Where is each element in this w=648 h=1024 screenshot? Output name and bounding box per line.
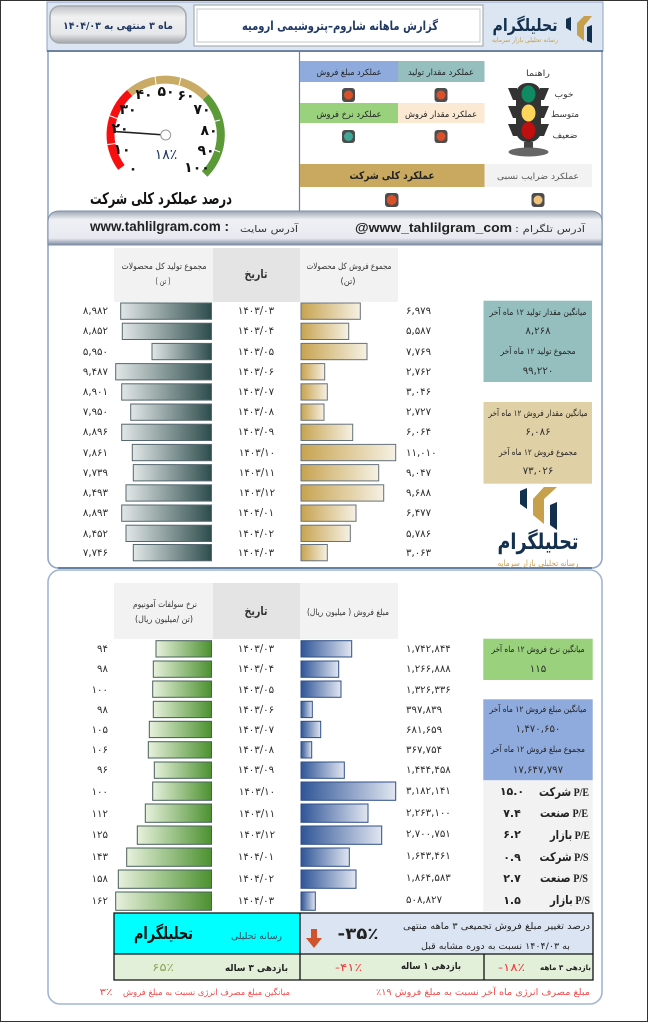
column header: date: تاریخ bbox=[244, 267, 268, 281]
values: sales rate: ۱۱۲ bbox=[92, 809, 109, 820]
values: sales amount: ۱,۶۴۳,۴۶۱ bbox=[406, 851, 451, 862]
light: sales quantity bbox=[434, 130, 448, 143]
return cell: 3 year: ۶۵٪ bbox=[152, 961, 174, 974]
values: sales rate: ۹۸ bbox=[97, 664, 109, 675]
stat box: sales amount averages: مجموع مبلغ فروش ۱۲ ماه آخر bbox=[490, 743, 585, 755]
bars: sales amount bbox=[301, 641, 396, 910]
values: sales rate: ۹۶ bbox=[97, 765, 108, 776]
legend title: راهنما bbox=[526, 69, 550, 79]
values: sales amount: ۱,۴۴۴,۴۵۸ bbox=[406, 765, 451, 776]
header logo: تحلیلگرام bbox=[492, 15, 558, 36]
values: production: ۸,۸۵۲ bbox=[83, 326, 109, 337]
dates: production table: ۱۴۰۳/۱۰ bbox=[239, 448, 275, 459]
dates: production table: ۱۴۰۳/۰۷ bbox=[238, 387, 275, 398]
cell: ratio performance: عملکرد ضرایب نسبی bbox=[497, 172, 579, 182]
values: sales rate: ۱۶۲ bbox=[92, 896, 109, 907]
panel: lower report frame bbox=[48, 570, 602, 1004]
values: sales rate: ۹۸ bbox=[97, 705, 109, 716]
values: production: ۷,۹۵۰ bbox=[83, 407, 108, 418]
stat box: sales averages: ۶,۰۸۶ bbox=[525, 427, 551, 438]
column header: total sales bbox=[300, 248, 398, 302]
stat box: sales averages: ۷۳,۰۲۶ bbox=[523, 466, 553, 477]
telegram address bbox=[355, 220, 585, 235]
values: sales amount: ۲,۲۶۳,۱۰۰ bbox=[406, 808, 451, 819]
values: sales: ۲,۷۲۷ bbox=[406, 407, 432, 418]
dates: production table: ۱۴۰۳/۰۶ bbox=[238, 367, 274, 378]
column header: ammonium sulfate rate: (تن /میلیون ریال) bbox=[135, 615, 193, 625]
divider between gauge and performance panel bbox=[298, 51, 300, 212]
dates: sales table: ۱۴۰۳/۱۰ bbox=[239, 787, 275, 798]
panel: valuation ratios bbox=[483, 780, 593, 911]
values: sales amount: ۳,۱۸۲,۱۴۱ bbox=[406, 786, 451, 797]
stat box: production averages: میانگین مقدار تولید ۱۲ ماه آخر bbox=[489, 306, 586, 318]
values: sales rate: ۱۰۰ bbox=[92, 685, 108, 696]
values: sales: ۶,۹۷۹ bbox=[406, 306, 432, 317]
report title: گزارش ماهانه شاروم–پتروشیمی ارومیه bbox=[242, 18, 439, 34]
values: production: ۵,۹۵۰ bbox=[83, 347, 108, 358]
gauge scale numbers: ۵۰ bbox=[157, 84, 175, 100]
values: sales: ۹,۰۴۷ bbox=[406, 468, 432, 479]
dates: sales table: ۱۴۰۴/۰۲ bbox=[238, 874, 275, 885]
values: production: ۹,۴۸۷ bbox=[83, 367, 109, 378]
values: sales rate bbox=[92, 644, 109, 907]
ratio: company P/S: P/S شرکت bbox=[540, 850, 589, 864]
dates: production table: ۱۴۰۳/۱۱ bbox=[239, 468, 275, 479]
column header: date: تاریخ bbox=[244, 604, 268, 618]
gauge tan arc bbox=[130, 80, 206, 97]
stat box: sales amount averages: ۱,۴۷۰,۶۵۰ bbox=[516, 724, 560, 735]
website address: www.tahlilgram.com : bbox=[89, 218, 229, 234]
values: sales: ۹,۶۸۸ bbox=[406, 488, 432, 499]
values: production: ۸,۹۸۲ bbox=[83, 306, 109, 317]
values: sales: ۶,۰۶۴ bbox=[406, 427, 431, 438]
return cell: 1 year: -۴۱٪ bbox=[335, 961, 362, 974]
values: sales amount: ۱,۷۴۲,۸۴۴ bbox=[406, 644, 451, 655]
column header: ammonium sulfate rate bbox=[114, 583, 213, 639]
gauge needle bbox=[115, 128, 171, 140]
ratio: company P/E bbox=[500, 785, 589, 799]
cell: sales amount performance bbox=[300, 61, 398, 82]
energy value: average: ۳٪ bbox=[100, 987, 112, 998]
values: production: ۸,۴۹۳ bbox=[83, 488, 109, 499]
values: sales: ۵,۵۸۷ bbox=[406, 326, 432, 337]
cell: overall performance: عملکرد کلی شرکت bbox=[350, 170, 434, 182]
values: sales amount: ۲,۷۰۰,۷۵۱ bbox=[406, 829, 451, 840]
dates: production table: ۱۴۰۴/۰۳ bbox=[238, 548, 275, 559]
values: sales rate: ۹۴ bbox=[97, 644, 108, 655]
dates: sales table: ۱۴۰۳/۱۲ bbox=[239, 830, 276, 841]
ratio: market P/S: ۱.۵ bbox=[503, 894, 521, 907]
bars: sales rate bbox=[116, 641, 212, 910]
stat box: sales averages: مجموع فروش ۱۲ ماه آخر bbox=[498, 446, 577, 458]
stat box: production averages: ۹۹,۲۲۰ bbox=[523, 366, 553, 377]
dates: production table: ۱۴۰۳/۰۸ bbox=[238, 407, 275, 418]
values: sales rate: ۱۵۸ bbox=[92, 874, 109, 885]
values: production: ۷,۸۶۱ bbox=[83, 448, 108, 459]
dates: sales table: ۱۴۰۳/۰۴ bbox=[238, 664, 274, 675]
cell: overall performance bbox=[300, 164, 484, 187]
change cell: به ۱۴۰۴/۰۳ نسبت به دوره مشابه قبل bbox=[421, 942, 570, 952]
cell: sales quantity performance bbox=[398, 103, 484, 123]
gauge green arc bbox=[205, 97, 221, 174]
light: production bbox=[434, 88, 448, 102]
values: sales rate: ۱۰۵ bbox=[92, 725, 108, 736]
bars: production bbox=[116, 303, 212, 561]
column header: date bbox=[213, 583, 300, 639]
panel: production and sales table bbox=[83, 248, 437, 561]
dates: sales table: ۱۴۰۳/۱۱ bbox=[239, 809, 275, 820]
ratio: market P/E bbox=[503, 828, 590, 842]
values: production: ۸,۹۰۱ bbox=[83, 387, 108, 398]
logo: Tahlilgram: تحلیلگرام bbox=[498, 528, 578, 555]
stat box: average sales rate bbox=[483, 639, 593, 680]
values: sales amount: ۱,۸۶۴,۵۸۳ bbox=[406, 873, 451, 884]
values: sales amount: ۶۸۱,۶۵۹ bbox=[406, 725, 443, 736]
column header: total production bbox=[114, 248, 213, 302]
values: sales amount bbox=[406, 644, 451, 906]
values: production: ۸,۸۹۳ bbox=[83, 508, 109, 519]
panel: upper report frame bbox=[48, 51, 602, 568]
dates: production table: ۱۴۰۳/۰۵ bbox=[238, 347, 274, 358]
legend label: weak: ضعیف bbox=[552, 131, 578, 141]
values: sales: ۳,۰۶۳ bbox=[406, 548, 432, 559]
column header: sales amount bbox=[300, 583, 398, 639]
values: sales rate: ۱۴۳ bbox=[92, 852, 109, 863]
values: sales rate: ۱۰۶ bbox=[92, 745, 108, 756]
return cell: 3 year bbox=[114, 954, 300, 980]
energy note: last month: مبلغ مصرف انرژی ماه آخر نسبت به مبلغ فروش ۱۹٪ bbox=[376, 986, 590, 998]
dates: sales table: ۱۴۰۳/۰۵ bbox=[238, 685, 274, 696]
return cell: 1 year: بازدهی ۱ ساله bbox=[401, 961, 461, 972]
values: production: ۸,۴۵۲ bbox=[83, 529, 109, 540]
change cell bbox=[300, 913, 593, 954]
stat box: sales amount averages: میانگین مبلغ فروش ۱۲ ماه آخر bbox=[489, 703, 586, 715]
values: sales rate: ۱۰۰ bbox=[92, 787, 108, 798]
light: ratios bbox=[532, 193, 544, 207]
header logo: رسانه تحلیلی بازار سرمایه bbox=[492, 36, 558, 44]
stat box: sales amount averages bbox=[483, 699, 593, 780]
legend label: medium: متوسط bbox=[551, 110, 579, 120]
column header: total sales: (تن) bbox=[340, 277, 356, 287]
gauge scale numbers: ۲۰ bbox=[111, 121, 129, 137]
column header: total production: ( تن ) bbox=[156, 277, 170, 287]
gauge scale numbers: ۰ bbox=[129, 161, 137, 177]
column header: total sales: مجموع فروش کل محصولات bbox=[306, 262, 392, 272]
values: sales amount: ۱,۲۶۶,۸۸۸ bbox=[406, 664, 451, 675]
icon: down arrow bbox=[306, 929, 322, 948]
date pill: ماه ۳ منتهی به ۱۴۰۴/۰۳ bbox=[63, 21, 173, 32]
cell: production performance: عملکرد مقدار تولید bbox=[408, 68, 474, 78]
dates: sales table: ۱۴۰۳/۰۶ bbox=[238, 705, 274, 716]
values: sales rate: ۱۲۵ bbox=[92, 830, 108, 841]
values: sales amount: ۱,۳۲۶,۳۳۶ bbox=[406, 685, 451, 696]
gauge red arc bbox=[111, 93, 130, 168]
values: production bbox=[83, 306, 109, 559]
legend label: good: خوب bbox=[554, 90, 574, 100]
telegram address: @www_tahlilgram_com bbox=[355, 220, 512, 235]
values: sales: ۷,۷۶۹ bbox=[406, 347, 432, 358]
values: sales: ۱۱,۰۱۰ bbox=[406, 448, 437, 459]
gauge scale numbers bbox=[111, 84, 218, 177]
cell: ratio performance bbox=[484, 164, 592, 187]
gauge scale numbers: ۳۰ bbox=[119, 102, 137, 118]
panel: performance indicators bbox=[300, 61, 592, 207]
column header: sales amount: مبلغ فروش ( میلیون ریال) bbox=[307, 608, 389, 618]
dates: production table: ۱۴۰۳/۰۹ bbox=[238, 427, 275, 438]
ratio: industry P/E: ۷.۴ bbox=[503, 807, 521, 820]
stat box: sales averages bbox=[484, 402, 592, 484]
stat box: production averages bbox=[484, 301, 592, 382]
gauge value: ۱۸٪ bbox=[155, 147, 177, 163]
gauge scale numbers: ۷۰ bbox=[193, 102, 211, 118]
column header: ammonium sulfate rate: نرخ سولفات آمونیوم bbox=[133, 598, 197, 610]
gauge scale numbers: ۱۰۰ bbox=[184, 160, 210, 176]
gauge scale numbers: ۴۰ bbox=[135, 87, 153, 103]
icon: traffic light bbox=[508, 83, 549, 156]
ratio: industry P/E: P/E صنعت bbox=[540, 806, 588, 820]
cell: sales rate performance: عملکرد نرخ فروش bbox=[316, 110, 382, 120]
website address: آدرس سایت bbox=[240, 222, 298, 235]
ratio: company P/S: ۰.۹ bbox=[503, 851, 521, 864]
values: sales: ۳,۰۴۶ bbox=[406, 387, 431, 398]
cell: sales quantity performance: عملکرد مقدار فروش bbox=[405, 110, 477, 120]
energy note: average: میانگین مبلغ مصرف انرژی نسبت به مبلغ فروش bbox=[123, 987, 290, 998]
summary table bbox=[114, 913, 593, 980]
column header: date bbox=[213, 248, 300, 302]
change cell: -۳۵٪ bbox=[338, 924, 378, 943]
stat box: production averages: مجموع تولید ۱۲ ماه آخر bbox=[500, 345, 576, 357]
contact band bbox=[48, 211, 602, 245]
gauge scale numbers: ۱۰ bbox=[113, 142, 131, 158]
return cell: 3 month bbox=[484, 954, 593, 980]
ratio: company P/E: P/E شرکت bbox=[539, 785, 589, 799]
values: sales: ۶,۴۷۷ bbox=[406, 508, 432, 519]
dates: production table: ۱۴۰۴/۰۲ bbox=[238, 529, 275, 540]
dates: production table bbox=[238, 306, 276, 559]
cell: sales rate performance bbox=[300, 103, 398, 123]
stat box: average sales rate: میانگین نرخ فروش ۱۲ ماه آخر bbox=[491, 643, 584, 655]
ratio: industry P/S bbox=[503, 871, 588, 885]
ratio: market P/E: P/E بازار bbox=[549, 828, 590, 842]
stat box: sales averages: میانگین مقدار فروش ۱۲ ماه آخر bbox=[488, 407, 588, 419]
gauge scale numbers: ۹۰ bbox=[197, 143, 215, 159]
values: sales amount: ۳۶۷,۷۵۴ bbox=[406, 745, 442, 756]
website address bbox=[89, 218, 298, 235]
logo: Tahlilgram: رسانه تحلیلی بازار سرمایه bbox=[498, 559, 578, 569]
gauge scale numbers: ۶۰ bbox=[177, 88, 195, 104]
logo: Tahlilgram bbox=[498, 487, 578, 569]
dates: sales table: ۱۴۰۴/۰۳ bbox=[238, 896, 275, 907]
brand cell: رسانه تحلیلی bbox=[231, 931, 282, 942]
values: sales: ۲,۷۶۲ bbox=[406, 367, 432, 378]
column header: total production: مجموع تولید کل محصولات bbox=[122, 262, 206, 272]
cell: production performance bbox=[398, 61, 484, 82]
dates: sales table: ۱۴۰۳/۰۷ bbox=[238, 725, 275, 736]
dates: sales table: ۱۴۰۳/۰۹ bbox=[238, 765, 275, 776]
gauge title: درصد عملکرد کلی شرکت bbox=[90, 189, 232, 208]
dates: production table: ۱۴۰۴/۰۱ bbox=[238, 508, 274, 519]
header logo bbox=[492, 15, 592, 44]
dates: production table: ۱۴۰۳/۱۲ bbox=[239, 488, 276, 499]
values: sales bbox=[406, 306, 437, 559]
return cell: 3 month: -۱۸٪ bbox=[498, 961, 525, 974]
return cell: 3 year: بازدهی ۳ ساله bbox=[225, 963, 288, 974]
light: sales amount bbox=[342, 88, 355, 102]
light: sales rate bbox=[342, 130, 355, 143]
values: sales: ۵,۷۸۶ bbox=[406, 529, 431, 540]
values: sales amount: ۳۹۷,۸۳۹ bbox=[406, 705, 443, 716]
stat box: sales amount averages: ۱۷,۶۴۷,۷۹۷ bbox=[513, 765, 564, 776]
report title bbox=[194, 5, 483, 46]
stat box: production averages: ۸,۲۶۸ bbox=[525, 326, 551, 337]
dates: sales table: ۱۴۰۳/۰۸ bbox=[238, 745, 275, 756]
brand cell: تحلیلگرام bbox=[134, 923, 193, 944]
bars: sales bbox=[301, 303, 396, 561]
gauge: overall company performance bbox=[90, 76, 232, 208]
ratio: market P/E: ۶.۲ bbox=[503, 828, 521, 841]
dates: sales table bbox=[238, 644, 276, 907]
stat box: average sales rate: ۱۱۵ bbox=[530, 664, 546, 675]
panel: sales amount and rate table bbox=[92, 583, 451, 910]
dates: sales table: ۱۴۰۴/۰۱ bbox=[238, 852, 274, 863]
ratio: industry P/S: P/S صنعت bbox=[540, 871, 588, 885]
ratio: industry P/S: ۲.۷ bbox=[503, 872, 521, 885]
values: production: ۷,۷۴۶ bbox=[83, 548, 108, 559]
cell: sales amount performance: عملکرد مبلغ فروش bbox=[316, 68, 382, 78]
dates: sales table: ۱۴۰۳/۰۳ bbox=[238, 644, 275, 655]
change cell: درصد تغییر مبلغ فروش تجمیعی ۳ ماهه منتهی bbox=[403, 922, 590, 932]
dates: production table: ۱۴۰۳/۰۳ bbox=[238, 306, 275, 317]
ratio: industry P/E bbox=[503, 806, 588, 820]
light: overall bbox=[385, 193, 398, 207]
return cell: 1 year bbox=[300, 954, 484, 980]
values: production: ۷,۷۳۹ bbox=[83, 468, 109, 479]
ratio: market P/S: P/S بازار bbox=[549, 893, 590, 907]
ratio: company P/S bbox=[503, 850, 589, 864]
telegram address: آدرس تلگرام : bbox=[515, 222, 585, 235]
ratio: market P/S bbox=[503, 893, 590, 907]
brand cell bbox=[114, 913, 300, 954]
date pill bbox=[50, 6, 186, 43]
values: production: ۸,۸۹۶ bbox=[83, 427, 108, 438]
header band bbox=[47, 2, 603, 51]
gauge scale numbers: ۸۰ bbox=[200, 123, 218, 139]
values: sales amount: ۵۰۸,۸۲۷ bbox=[406, 895, 443, 906]
ratio: company P/E: ۱۵.۰ bbox=[500, 785, 524, 798]
return cell: 3 month: بازدهی ۳ ماهه bbox=[540, 963, 591, 972]
dates: production table: ۱۴۰۳/۰۴ bbox=[238, 326, 274, 337]
